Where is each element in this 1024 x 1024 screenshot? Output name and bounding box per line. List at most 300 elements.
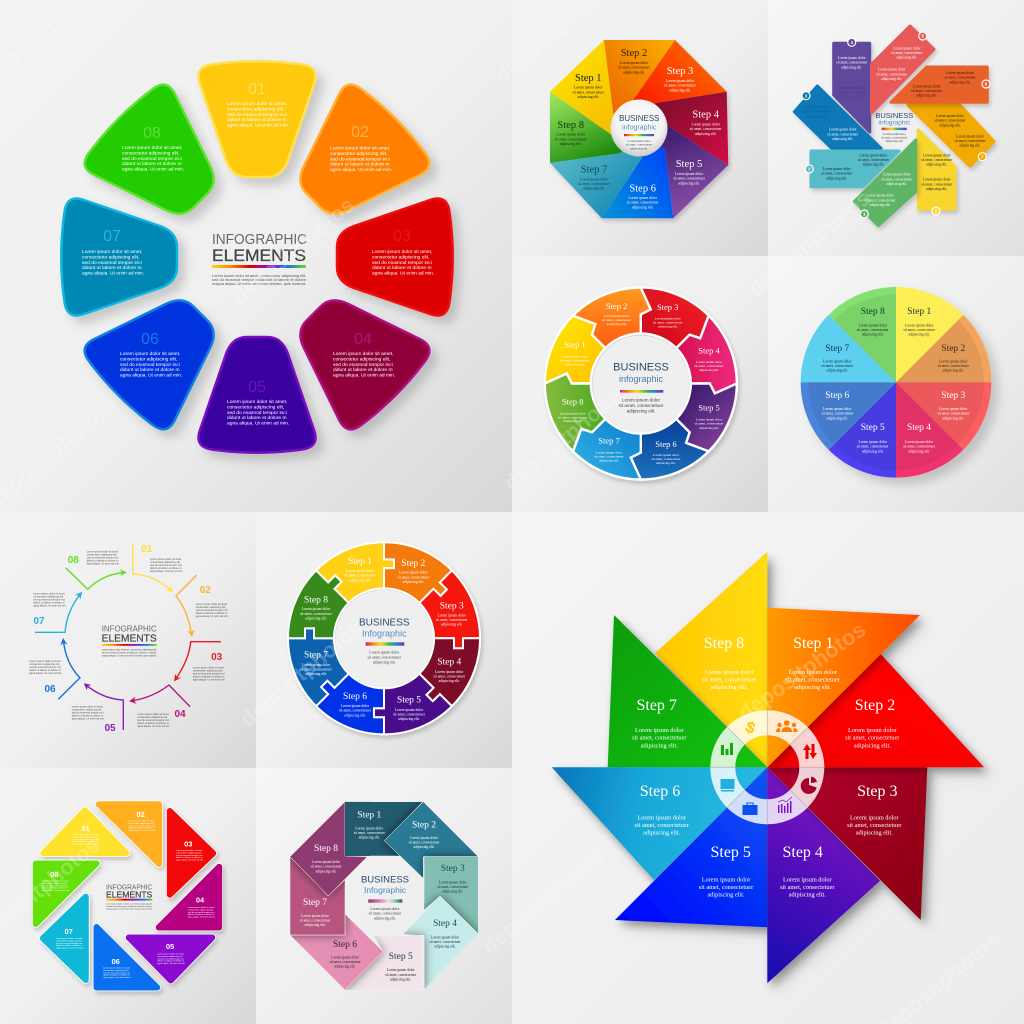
step descriptions: sit amet, consectetuer	[690, 127, 722, 132]
pie labels: sit amet, consectetuer	[857, 328, 889, 333]
center circle: BUSINESS	[619, 114, 660, 123]
ribbon number badges: 5	[921, 34, 924, 39]
pie labels: Step 4	[907, 423, 931, 433]
step descriptions: Lorem ipsum dolor	[691, 122, 721, 126]
ribbon text: Lorem ipsum dolor	[936, 114, 965, 118]
petal numbers	[103, 81, 411, 396]
step titles: Step 8	[557, 120, 584, 131]
arrow numbers: 01	[141, 544, 153, 555]
puzzle labels: Lorem ipsum dolor	[395, 708, 424, 712]
petal numbers: 07	[103, 228, 121, 245]
step titles: Step 7	[581, 164, 607, 176]
origami descriptions: Lorem ipsum dolor	[387, 968, 415, 972]
petal text blocks: consectetur adipiscing elit,	[82, 254, 139, 260]
center circle: sit amet, consectetuer	[626, 143, 652, 148]
ring step labels: adipiscing elit.	[699, 426, 719, 430]
triangle text blocks: sed do eiusmod tempor inci	[157, 957, 185, 960]
petal text blocks: agna aliqua. Ut enim ad min.	[372, 271, 434, 277]
origami descriptions: adipiscing elit.	[304, 923, 326, 927]
ribbon text: Lorem ipsum dolor	[956, 134, 985, 138]
watermark text: depositphotos	[743, 185, 875, 302]
origami descriptions: adipiscing elit.	[434, 944, 456, 948]
arrow text blocks: sed do eiusmod tempor inci	[193, 672, 225, 676]
arrow text blocks: consectetur adipiscing elit,	[196, 605, 226, 609]
ribbon text: Lorem ipsum dolor	[913, 84, 941, 88]
arrow text blocks: didunt ut labore et dolore m	[193, 675, 224, 679]
petal text blocks: agna aliqua. Ut enim ad min.	[82, 271, 144, 277]
ribbon text: sit amet, consectetuer	[954, 139, 986, 144]
pinwheel labels: Step 7	[636, 697, 677, 714]
puzzle labels: adipiscing elit.	[402, 580, 424, 584]
panel: ribbon pinwheel	[794, 26, 994, 226]
step descriptions: adipiscing elit.	[678, 181, 700, 185]
origami descriptions: sit amet, consectetuer	[329, 960, 361, 965]
pie labels: Lorem ipsum dolor	[939, 407, 968, 411]
pinwheel labels: adipiscing elit.	[789, 892, 826, 899]
arrow text blocks: consectetur adipiscing elit,	[33, 594, 64, 598]
step titles: Step 1	[575, 73, 602, 84]
puzzle labels: Step 3	[440, 602, 464, 612]
ribbon text: adipiscing elit.	[806, 114, 827, 118]
puzzle labels: Step 7	[304, 650, 328, 660]
triangle text blocks: sed do eiusmod tempor inci	[73, 838, 100, 841]
triangle text blocks: consectetur adipiscing elit,	[73, 835, 99, 838]
step descriptions: Lorem ipsum dolor	[675, 172, 704, 176]
petal numbers: 05	[248, 379, 266, 396]
puzzle center: adipiscing elit.	[373, 660, 396, 664]
puzzle labels: Lorem ipsum dolor	[435, 670, 464, 674]
pie labels: sit amet, consectetuer	[821, 364, 854, 369]
ribbon text: Lorem ipsum dolor	[923, 178, 951, 182]
puzzle labels: Step 8	[304, 596, 328, 606]
center heading: INFOGRAPHIC	[212, 232, 307, 248]
petal text blocks: sed do eiusmod tempor inci	[82, 260, 142, 266]
arrow 05	[81, 680, 123, 730]
center icon ring	[710, 710, 825, 825]
puzzle center	[336, 590, 432, 687]
triangle numbers: 03	[184, 840, 192, 848]
center circle	[610, 100, 668, 156]
ring step labels: Step 6	[655, 439, 677, 449]
ribbon text: sit amet, consectetuer	[921, 158, 953, 163]
step titles: Step 2	[621, 48, 647, 59]
triangle text blocks: agna aliqua. Ut enim ad min.	[103, 976, 132, 979]
petal text blocks: agna aliqua. Ut enim ad min.	[120, 373, 182, 379]
ribbon text: Lorem ipsum dolor	[946, 71, 975, 75]
petal text blocks: consectetur adipiscing elit,	[227, 404, 284, 410]
pinwheel labels: adipiscing elit.	[641, 742, 678, 749]
origami descriptions: adipiscing elit.	[334, 965, 356, 969]
icon: people	[776, 720, 798, 732]
arrow text blocks: didunt ut labore et dolore m	[33, 600, 65, 604]
puzzle center: BUSINESS	[359, 618, 410, 628]
ring step labels	[558, 301, 725, 465]
triangle text blocks: Lorem ipsum dolor sit amet,	[73, 833, 100, 836]
origami descriptions: adipiscing elit.	[315, 869, 337, 873]
petal text blocks: agna aliqua. Ut enim ad min.	[333, 373, 395, 379]
step descriptions: adipiscing elit.	[695, 132, 717, 136]
puzzle labels: sit amet, consectetuer	[300, 612, 333, 617]
ring step labels: sit amet, consectetuer	[651, 457, 682, 462]
ring step labels: Step 8	[562, 396, 583, 406]
ring step labels: Step 1	[564, 340, 586, 350]
origami descriptions: sit amet, consectetuer	[429, 940, 461, 945]
arrow text blocks: agna aliqua. Ut enim ad min.	[193, 678, 226, 682]
pinwheel labels: Lorem ipsum dolor	[635, 727, 685, 734]
pie labels: adipiscing elit.	[942, 416, 964, 420]
origami descriptions	[299, 827, 469, 982]
arrow numbers: 03	[211, 652, 223, 663]
ribbon text: sit amet, consectetuer	[858, 158, 890, 163]
petal text blocks: consectetur adipiscing elit,	[372, 254, 429, 260]
panel: origami octagon	[290, 802, 478, 990]
pie labels: adipiscing elit.	[826, 368, 848, 372]
origami descriptions: Lorem ipsum dolor	[355, 827, 384, 831]
petal text blocks: consectetur adipiscing elit,	[333, 356, 390, 362]
puzzle center: Infographic	[362, 628, 407, 638]
pie labels: sit amet, consectetuer	[903, 445, 936, 450]
step descriptions: sit amet, consectetuer	[578, 182, 611, 187]
arrow text blocks: agna aliqua. Ut enim ad min.	[150, 569, 183, 573]
ribbon text: Lorem ipsum dolor	[878, 68, 906, 72]
pie labels: sit amet, consectetuer	[821, 412, 854, 417]
origami descriptions: adipiscing elit.	[413, 845, 435, 849]
ring center: adipiscing elit.	[627, 408, 655, 414]
step titles: Step 5	[676, 159, 702, 170]
origami titles: Step 3	[441, 864, 465, 874]
puzzle labels: Step 2	[401, 559, 426, 569]
petal text blocks: agna aliqua. Ut enim ad min.	[227, 421, 289, 427]
origami titles: Step 5	[389, 952, 413, 962]
origami center: BUSINESS	[361, 874, 409, 886]
triangle text blocks: Lorem ipsum dolor sit amet,	[103, 966, 131, 970]
petal text blocks: didunt ut labore et dolore m	[122, 161, 182, 167]
arrow text blocks: sed do eiusmod tempor inci	[196, 608, 228, 612]
pinwheel labels: sit amet, consectetuer	[699, 884, 754, 891]
arrow 02	[176, 575, 197, 638]
arrow text blocks: Lorem ipsum dolor sit amet,	[29, 659, 62, 663]
ribbon text: adipiscing elit.	[926, 187, 947, 191]
pinwheel labels: Lorem ipsum dolor	[705, 669, 755, 676]
ribbon text: Lorem ipsum dolor	[838, 86, 866, 90]
petal text blocks: didunt ut labore et dolore m	[227, 117, 287, 123]
step descriptions: Lorem ipsum dolor	[556, 132, 586, 136]
puzzle labels: sit amet, consectetuer	[397, 575, 430, 580]
petal text blocks: sed do eiusmod tempor inci	[122, 156, 182, 162]
puzzle labels: Lorem ipsum dolor	[302, 663, 331, 667]
triangle text blocks: didunt ut labore et dolore m	[188, 913, 215, 916]
arrow text blocks: consectetur adipiscing elit,	[29, 662, 60, 666]
origami titles: Step 1	[357, 810, 382, 820]
pie fold overlays	[790, 276, 1002, 488]
arrow text blocks: Lorem ipsum dolor sit amet,	[72, 705, 104, 709]
arrow text blocks: consectetur adipiscing elit,	[150, 560, 181, 564]
arrows center heading: Lorem ipsum dolor sit amet, consectetur adipiscing elit,	[102, 648, 157, 652]
ribbon number badges	[802, 32, 990, 218]
triangle numbers: 05	[166, 942, 174, 951]
step descriptions: sit amet, consectetuer	[627, 201, 659, 206]
petal text blocks: Lorem ipsum dolor sit amet,	[120, 351, 180, 357]
petal numbers: 01	[248, 81, 266, 98]
ring step labels: sit amet, consectetuer	[602, 318, 632, 323]
puzzle labels: adipiscing elit.	[398, 717, 420, 721]
triangle text blocks: sed do eiusmod tempor inci	[128, 824, 156, 827]
ring step labels: Lorem ipsum dolor	[655, 316, 682, 320]
triangles	[36, 804, 219, 988]
arrow text blocks: didunt ut labore et dolore m	[137, 721, 169, 725]
arrows center heading	[102, 624, 157, 658]
pinwheel labels: adipiscing elit.	[856, 830, 893, 837]
puzzle labels: Lorem ipsum dolor	[399, 571, 428, 575]
arrow text blocks: sed do eiusmod tempor inci	[87, 555, 119, 559]
petal text blocks: sed do eiusmod tempor inci	[333, 362, 393, 368]
ring step labels: sit amet, consectetuer	[558, 415, 588, 420]
origami descriptions: sit amet, consectetuer	[408, 840, 440, 846]
pie labels	[821, 307, 970, 453]
ring step labels: adipiscing elit.	[607, 322, 627, 326]
panel: octagon pinwheel wheel	[550, 40, 728, 218]
ring center	[593, 336, 689, 432]
triangles center heading	[106, 882, 153, 910]
step titles: Step 3	[667, 66, 693, 77]
ribbon text: sit amet, consectetuer	[944, 76, 976, 81]
arrow text blocks: sed do eiusmod tempor inci	[33, 597, 65, 601]
triangle text blocks: agna aliqua. Ut enim ad min.	[73, 843, 101, 846]
triangle text blocks: didunt ut labore et dolore m	[42, 887, 69, 890]
panel: arrow ring	[525, 268, 757, 499]
pinwheel labels: Lorem ipsum dolor	[850, 814, 900, 821]
pie labels: Step 2	[941, 344, 966, 354]
arrow text blocks: consectetur adipiscing elit,	[72, 708, 102, 712]
triangle text blocks: agna aliqua. Ut enim ad min.	[42, 889, 70, 892]
ring step labels: Lorem ipsum dolor	[596, 450, 623, 454]
puzzle labels: adipiscing elit.	[305, 672, 327, 676]
triangle numbers: 01	[82, 824, 90, 833]
pie labels: Lorem ipsum dolor	[823, 407, 852, 411]
pie labels: Step 8	[861, 307, 885, 317]
panel: puzzle ring	[268, 522, 500, 754]
puzzle labels: Step 6	[343, 692, 367, 702]
puzzle labels: sit amet, consectetuer	[344, 574, 377, 579]
arrow text blocks: consectetur adipiscing elit,	[137, 715, 168, 719]
center heading	[212, 232, 307, 286]
ribbon text: Lorem ipsum dolor	[803, 105, 831, 109]
petal text blocks: agna aliqua. Ut enim ad min.	[227, 123, 289, 129]
ribbon text: adipiscing elit.	[959, 144, 981, 148]
puzzle labels: sit amet, consectetuer	[393, 712, 426, 718]
puzzle labels: Lorem ipsum dolor	[302, 607, 331, 611]
ribbon text: sit amet, consectetuer	[836, 91, 868, 96]
puzzle labels: Step 4	[437, 658, 462, 668]
ring step labels: Step 2	[606, 301, 627, 311]
petal text blocks: sed do eiusmod tempor inci	[120, 362, 180, 368]
petal text blocks: didunt ut labore et dolore m	[82, 265, 142, 271]
origami center: Infographic	[364, 885, 407, 895]
arrow text blocks: agna aliqua. Ut enim ad min.	[33, 603, 67, 607]
arrow text blocks: didunt ut labore et dolore m	[87, 558, 118, 562]
ribbon text: adipiscing elit.	[886, 182, 907, 186]
pinwheel labels: adipiscing elit.	[643, 830, 681, 837]
ring step labels: adipiscing elit.	[658, 324, 678, 328]
step descriptions: Lorem ipsum dolor	[580, 178, 609, 182]
petal text blocks: sed do eiusmod tempor inci	[227, 410, 287, 416]
pinwheel labels: adipiscing elit.	[707, 892, 745, 899]
step titles: Step 4	[692, 110, 720, 120]
icon: bar chart	[721, 743, 733, 755]
step titles: Step 6	[629, 184, 656, 194]
triangle numbers	[50, 810, 205, 966]
origami titles: Step 6	[333, 940, 357, 950]
triangle numbers: 07	[65, 927, 73, 936]
petal text blocks: Lorem ipsum dolor sit amet,	[227, 101, 287, 107]
arrow text blocks: didunt ut labore et dolore m	[150, 566, 182, 570]
arrows center heading: magna aliqua. Ut enim ad minim veniam, quis nostrud.	[102, 654, 157, 658]
pie labels: Step 5	[861, 423, 885, 433]
ribbon text: Lorem ipsum dolor	[893, 46, 921, 50]
origami descriptions: Lorem ipsum dolor	[301, 914, 330, 918]
triangle text blocks: consectetur adipiscing elit,	[56, 939, 82, 942]
origami descriptions: adipiscing elit.	[442, 890, 463, 894]
ribbon text: adipiscing elit.	[926, 163, 947, 167]
ribbon text: adipiscing elit.	[896, 56, 917, 60]
ring step labels: sit amet, consectetuer	[594, 454, 625, 460]
triangle text blocks: agna aliqua. Ut enim ad min.	[56, 947, 84, 950]
arrow 03	[171, 642, 221, 684]
ribbon text: adipiscing elit.	[939, 123, 961, 127]
arrow 08	[66, 568, 127, 589]
step descriptions: Lorem ipsum dolor	[628, 196, 658, 200]
puzzle labels	[300, 557, 468, 721]
petal numbers: 08	[143, 125, 161, 142]
arrow numbers: 02	[200, 585, 211, 596]
icon: monitor	[720, 779, 734, 792]
origami center	[361, 874, 409, 920]
origami descriptions: sit amet, consectetuer	[385, 973, 417, 978]
pie labels: Step 6	[825, 391, 850, 401]
petal text blocks: didunt ut labore et dolore m	[120, 367, 180, 373]
origami descriptions: Lorem ipsum dolor	[439, 880, 467, 884]
petal text blocks: Lorem ipsum dolor sit amet,	[82, 249, 142, 255]
petal text blocks: sed do eiusmod tempor inci	[372, 260, 432, 266]
ribbon text: adipiscing elit.	[826, 176, 847, 180]
triangle text blocks: Lorem ipsum dolor sit amet,	[56, 937, 83, 940]
ribbon text: sit amet, consectetuer	[827, 132, 859, 137]
triangles center heading: sed do eiusmod tempor incididunt ut labore et dolore	[106, 905, 153, 908]
pie labels: Lorem ipsum dolor	[905, 440, 934, 444]
triangle text blocks: sed do eiusmod tempor inci	[176, 854, 203, 857]
origami descriptions: Lorem ipsum dolor	[331, 956, 360, 960]
petal text blocks: sed do eiusmod tempor inci	[227, 112, 287, 118]
step descriptions: sit amet, consectetuer	[555, 138, 587, 142]
ring center: sit amet, consectetuer	[619, 403, 664, 408]
ribbon text: Lorem ipsum dolor	[838, 56, 866, 60]
pie labels: sit amet, consectetuer	[937, 412, 970, 417]
ribbon text: adipiscing elit.	[949, 80, 971, 84]
pinwheel labels: Step 6	[640, 783, 680, 800]
triangle text blocks: Lorem ipsum dolor sit amet,	[42, 880, 69, 882]
arrow text blocks: Lorem ipsum dolor sit amet,	[33, 591, 66, 595]
step descriptions: adipiscing elit.	[623, 70, 645, 74]
ring center: BUSINESS	[613, 362, 669, 374]
ring step labels: sit amet, consectetuer	[653, 320, 683, 326]
ribbon text: adipiscing elit.	[863, 163, 884, 167]
arrow text blocks: consectetur adipiscing elit,	[87, 552, 117, 556]
origami folds	[290, 802, 478, 990]
arrow 07	[35, 590, 85, 632]
ring step labels: adipiscing elit.	[699, 368, 719, 372]
triangle text blocks: agna aliqua. Ut enim ad min.	[176, 859, 204, 862]
step descriptions: sit amet, consectetuer	[618, 66, 651, 71]
origami titles: Step 8	[314, 844, 338, 854]
arrow numbers: 07	[33, 616, 45, 627]
arrow text blocks: sed do eiusmod tempor inci	[72, 711, 104, 715]
pinwheel labels: sit amet, consectetuer	[702, 676, 757, 684]
pinwheel labels: adipiscing elit.	[854, 742, 891, 749]
step descriptions: Lorem ipsum dolor	[666, 79, 695, 83]
ribbon center label: infographic	[878, 120, 911, 127]
origami descriptions: Lorem ipsum dolor	[410, 836, 439, 840]
triangle text blocks: didunt ut labore et dolore m	[128, 827, 155, 830]
pinwheel labels: sit amet, consectetuer	[632, 735, 687, 742]
octagon segments	[550, 40, 728, 218]
pie labels: Lorem ipsum dolor	[905, 324, 934, 328]
arrow numbers: 05	[104, 723, 116, 734]
triangle text blocks: didunt ut labore et dolore m	[73, 840, 100, 843]
ring step labels: sit amet, consectetuer	[694, 422, 725, 427]
pie labels: adipiscing elit.	[908, 332, 930, 336]
petal text blocks: sed do eiusmod tempor inci	[330, 156, 390, 162]
petal text blocks	[82, 101, 434, 427]
watermark text: depositphotos	[227, 192, 359, 309]
triangle text blocks: consectetur adipiscing elit,	[128, 822, 154, 825]
pinwheel labels: Step 5	[710, 844, 751, 861]
pinwheel labels: Lorem ipsum dolor	[788, 669, 838, 676]
center heading: Lorem ipsum dolor sit amet, consectetur adipiscing elit,	[212, 273, 306, 278]
petal text blocks: agna aliqua. Ut enim ad min.	[122, 167, 184, 173]
puzzle labels: sit amet, consectetuer	[339, 709, 372, 714]
icon: dollar: $	[743, 719, 758, 738]
triangle text blocks: sed do eiusmod tempor inci	[103, 971, 131, 974]
ring step labels: Step 4	[698, 346, 720, 356]
pie labels: Step 7	[825, 344, 850, 354]
pie labels: adipiscing elit.	[862, 449, 884, 453]
arrow text blocks: sed do eiusmod tempor inci	[150, 563, 182, 567]
puzzle labels: Step 1	[348, 557, 372, 567]
center circle: Lorem ipsum dolor	[627, 139, 651, 143]
pie labels: Lorem ipsum dolor	[858, 440, 888, 444]
icon: briefcase	[742, 803, 758, 815]
origami titles	[303, 810, 465, 962]
petal text blocks: consectetur adipiscing elit,	[122, 150, 179, 156]
petal text blocks: Lorem ipsum dolor sit amet,	[227, 399, 287, 405]
arrow text blocks: agna aliqua. Ut enim ad min.	[87, 561, 120, 565]
ring step labels: sit amet, consectetuer	[694, 364, 725, 369]
origami descriptions: sit amet, consectetuer	[437, 885, 469, 890]
origami descriptions: sit amet, consectetuer	[310, 865, 342, 870]
step descriptions: adipiscing elit.	[560, 142, 582, 146]
ribbon text: sit amet, consectetuer	[891, 51, 923, 56]
triangles center heading: magna aliqua. Ut enim ad minim veniam, quis nostrud.	[106, 908, 153, 910]
ribbon number badges: 4	[850, 40, 853, 45]
step descriptions: adipiscing elit.	[577, 95, 599, 99]
arrow 04	[129, 685, 190, 707]
petal text blocks: consectetur adipiscing elit,	[227, 106, 284, 112]
pinwheel labels: Lorem ipsum dolor	[637, 814, 687, 821]
ribbon number badges: 3	[805, 93, 808, 98]
pinwheel labels: Lorem ipsum dolor	[702, 876, 751, 883]
origami descriptions: adipiscing elit.	[359, 836, 380, 840]
watermark text: depositphotos	[733, 617, 871, 726]
